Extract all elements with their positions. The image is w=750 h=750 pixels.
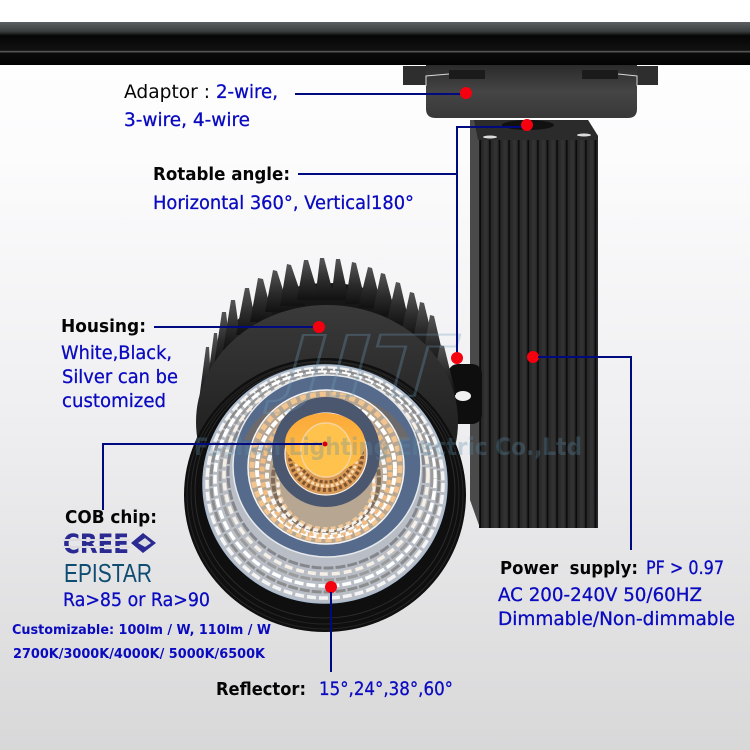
callout: COB chip: 2700K/3000K/4000K/ 5000K/6500K (13, 647, 266, 662)
reflector (203, 365, 447, 603)
COB chip (285, 413, 367, 495)
callout: housing: Silver can be (62, 366, 178, 388)
callout: power supply: Dimmable/Non-dimmable (498, 608, 735, 630)
cooling fins (199, 258, 456, 517)
callout: power supply: PF > 0.97 (646, 557, 724, 579)
logo: EPISTAR: EPISTAR (64, 558, 152, 588)
watermark: Foshan Lighting Electric Co.,Ltd (194, 433, 582, 461)
callout: adaptor: Adaptor : (124, 81, 210, 103)
square heat-sink driver box (470, 120, 598, 528)
logo: CREE: CREE (63, 529, 129, 560)
callout: reflector: 15°,24°,38°,60° (319, 678, 453, 700)
callout: reflector (216, 581, 453, 700)
callout: housing: customized (62, 390, 166, 412)
callout: COB chip: Ra>85 or Ra>90 (63, 589, 210, 611)
watermark: JIT (264, 318, 460, 416)
lamp head (184, 258, 466, 632)
callout: rotable angle: Rotable angle: (153, 164, 290, 185)
callout: COB chip: COB chip: (65, 507, 157, 528)
track adaptor (403, 65, 658, 118)
callout: power supply (498, 351, 735, 630)
callout: adaptor: 2-wire, (216, 81, 278, 103)
callout: COB chip (12, 442, 328, 662)
callout: power supply: Power supply: (500, 558, 638, 579)
callout: power supply: AC 200-240V 50/60HZ (498, 584, 702, 606)
watermark (194, 318, 582, 461)
track rail (0, 22, 750, 65)
callout: COB chip: Customizable: 100lm / W, 110lm / W (12, 623, 271, 638)
callout: adaptor (124, 81, 472, 131)
callout: reflector: Reflector: (216, 679, 306, 700)
callout: housing (61, 316, 325, 412)
callout: adaptor: 3-wire, 4-wire (124, 109, 250, 131)
callout: housing: White,Black, (61, 342, 172, 364)
pivot joint (448, 364, 482, 424)
housing cylinder (196, 305, 458, 539)
callout: rotable angle: Horizontal 360°, Vertical180° (153, 192, 414, 214)
callout: rotable angle (153, 119, 533, 364)
front bezel (184, 358, 466, 632)
callout: housing: Housing: (61, 316, 146, 337)
